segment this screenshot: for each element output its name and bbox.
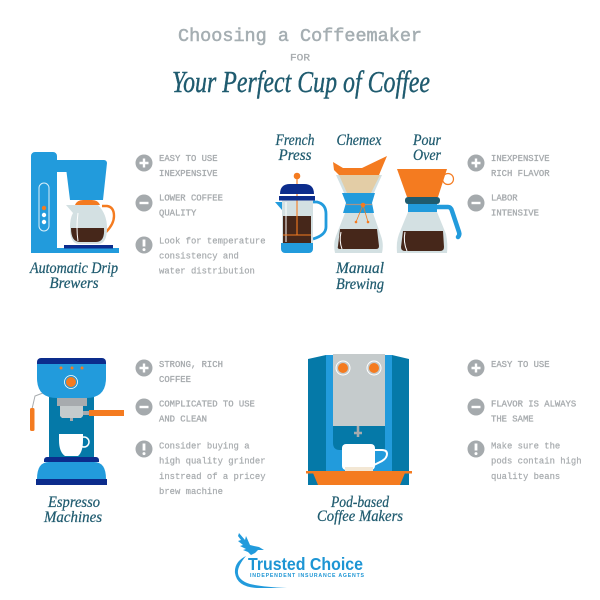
logo swoosh [235, 556, 287, 588]
label: espresso machines: Machines [43, 509, 102, 526]
pros and cons: Make sure the [491, 442, 560, 452]
pros and cons [468, 360, 582, 482]
pros and cons [136, 360, 266, 497]
label: espresso machines [43, 494, 102, 526]
panel: espresso machines [30, 358, 266, 526]
panel: automatic drip brewers [29, 152, 266, 292]
pros and cons [136, 154, 266, 276]
panel: pod-based coffee makers [306, 354, 582, 525]
pros and cons: quality beans [491, 472, 560, 482]
pros and cons: consistency and [159, 252, 239, 262]
pros and cons: brew machine [159, 487, 223, 497]
label: chemex: Chemex [336, 132, 382, 149]
label: pod-based coffee makers [317, 494, 403, 525]
label: espresso machines: Espresso [47, 494, 100, 511]
label: french press [275, 132, 314, 164]
pros and cons: pods contain high [491, 456, 582, 466]
label: pod-based coffee makers: Pod-based [330, 494, 390, 511]
label: pour over: Pour [412, 132, 442, 149]
pros and cons: instread of a pricey [159, 472, 266, 482]
pros and cons: INTENSIVE [491, 208, 539, 218]
label: manual brewing: Brewing [336, 276, 384, 293]
pros and cons: INEXPENSIVE [159, 169, 218, 179]
label: manual brewing [335, 260, 385, 293]
label: french press: Press [278, 147, 312, 164]
pros and cons: RICH FLAVOR [491, 169, 550, 179]
pros and cons: high quality grinder [159, 456, 266, 466]
pros and cons: water distribution [159, 266, 255, 276]
title [172, 26, 430, 99]
pros and cons: THE SAME [491, 414, 534, 424]
pros and cons: QUALITY [159, 208, 197, 218]
label: brewers: Brewers [50, 275, 98, 292]
icon: pod machine [306, 354, 412, 485]
icon: chemex [333, 156, 387, 253]
icon: pour over [397, 169, 459, 253]
icon: eagle [238, 533, 264, 555]
icon: french press [275, 173, 326, 253]
label: automatic drip: Automatic Drip [29, 260, 118, 277]
pros and cons: COFFEE [159, 375, 191, 385]
logo wordmark: Trusted Choice [248, 554, 363, 574]
title: Choosing a Coffeemaker [178, 26, 422, 47]
icon: drip brewer [31, 152, 119, 253]
pros and cons: EASY TO USE [159, 154, 218, 164]
logo tagline: INDEPENDENT INSURANCE AGENTS [250, 573, 365, 579]
label: pod-based coffee makers: Coffee Makers [317, 508, 403, 525]
logo: trusted choice [235, 533, 365, 588]
icon: espresso machine [30, 358, 124, 485]
title: Your Perfect Cup of Coffee [172, 64, 430, 99]
label: pour over [412, 132, 442, 164]
pros and cons: EASY TO USE [491, 360, 550, 370]
pros and cons: FLAVOR IS ALWAYS [491, 400, 576, 410]
pros and cons: Consider buying a [159, 442, 250, 452]
label: manual brewing: Manual [335, 260, 385, 277]
label: french press: French [275, 132, 314, 149]
panel: manual brewing [275, 132, 550, 293]
pros and cons: LOWER COFFEE [159, 194, 223, 204]
pros and cons: INEXPENSIVE [491, 154, 550, 164]
pros and cons: LABOR [491, 194, 518, 204]
label: pour over: Over [413, 147, 442, 164]
pros and cons: COMPLICATED TO USE [159, 400, 255, 410]
title: FOR [290, 54, 310, 64]
pros and cons [468, 154, 550, 218]
pros and cons: STRONG, RICH [159, 360, 223, 370]
pros and cons: AND CLEAN [159, 414, 207, 424]
pros and cons: Look for temperature [159, 236, 266, 246]
